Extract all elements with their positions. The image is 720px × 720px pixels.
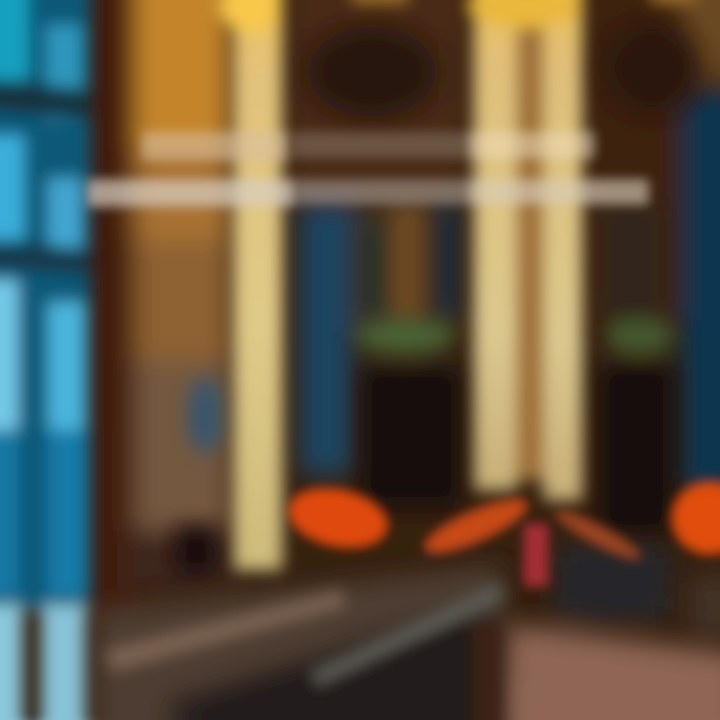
panel: pale horizontal bands xyxy=(88,132,648,206)
panel: orange cushions xyxy=(283,480,720,586)
panel: plant and dark niches xyxy=(175,205,674,574)
panel: table highlights xyxy=(105,582,504,720)
panel: blue window xyxy=(0,0,91,720)
panel: table and floor xyxy=(95,545,720,720)
panel: wall base tones xyxy=(90,0,720,620)
panel: cream columns xyxy=(218,0,696,570)
panel: dark arches xyxy=(306,22,702,118)
